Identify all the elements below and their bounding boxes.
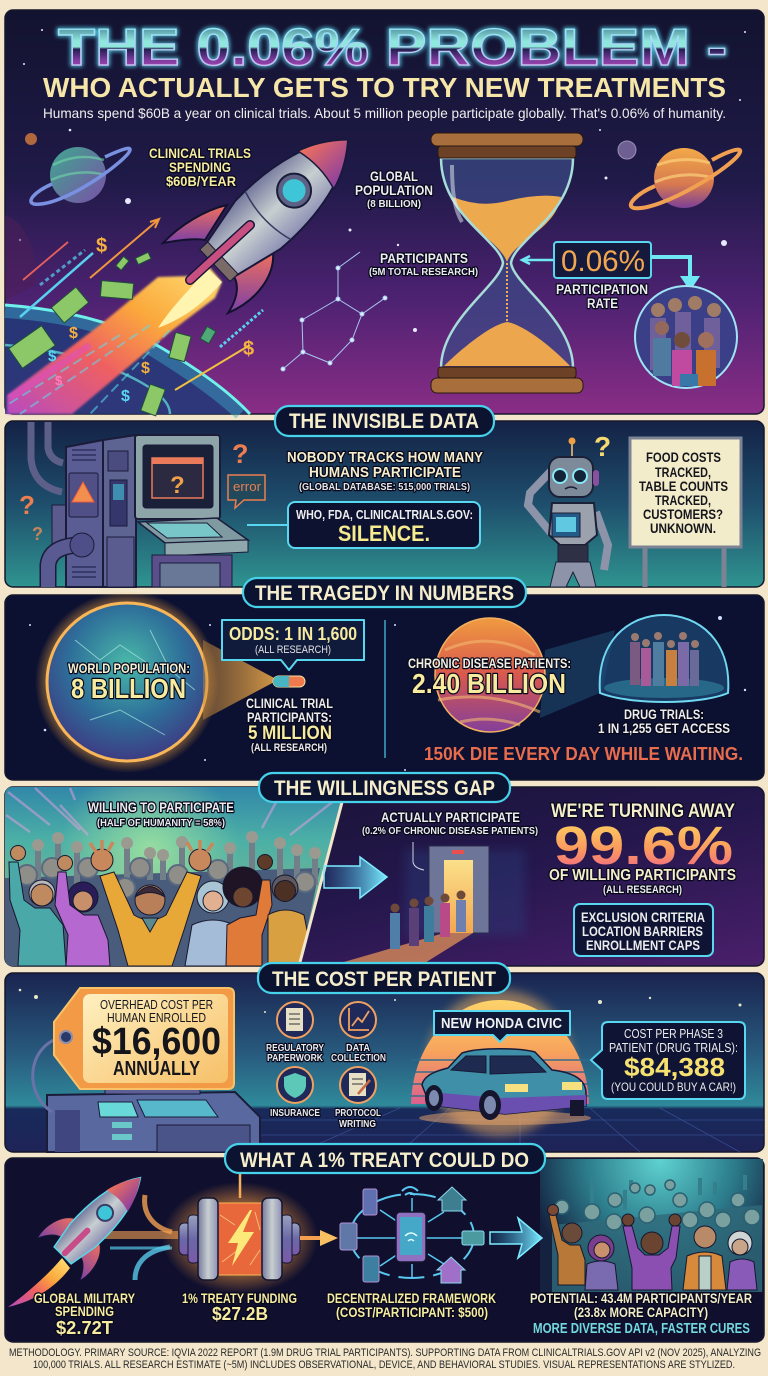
icon: question marks: ?	[19, 490, 35, 520]
sign: food costs: TABLE COUNTS	[639, 478, 728, 494]
methodology footer	[9, 1347, 761, 1371]
icon: price tag	[33, 988, 234, 1112]
label: actually participate	[362, 810, 538, 837]
callout: 0.06 percent: 0.06%	[561, 245, 645, 278]
heading: the willingness gap: THE WILLINGNESS GAP	[274, 777, 495, 800]
background stars	[19, 29, 746, 332]
arrow: willing to actual	[324, 857, 387, 898]
stat: turning away: 99.6%	[554, 816, 733, 876]
figure: orange woman	[223, 854, 272, 966]
label: clinical trials spending	[149, 145, 251, 189]
sign: food costs: CUSTOMERS?	[643, 506, 723, 522]
money and trails: $	[69, 325, 78, 342]
label: clinical trial participants: CLINICAL TRIAL	[246, 696, 333, 711]
figure: raised-arms man	[622, 1214, 681, 1290]
text: nobody tracks: NOBODY TRACKS HOW MANY	[287, 450, 483, 466]
panel: the cost per patient	[5, 973, 764, 1152]
icon: error bubble: error	[233, 479, 262, 494]
figure: mustard man	[268, 875, 308, 966]
icon: orange ringed planet	[618, 141, 740, 208]
callout: cost per phase 3: PATIENT (DRUG TRIALS):	[609, 1041, 738, 1055]
callout: odds: ODDS: 1 IN 1,600	[229, 624, 357, 644]
label: clinical trials spending: CLINICAL TRIALS	[149, 145, 251, 161]
label: global population: GLOBAL	[370, 169, 418, 184]
callout: barriers	[574, 904, 713, 956]
right fin	[228, 252, 273, 313]
figure: purple-haired woman	[585, 1235, 618, 1290]
stat: turning away	[549, 800, 736, 896]
background stars	[29, 616, 746, 771]
label: world population: WORLD POPULATION:	[68, 660, 190, 676]
icon: regulatory paperwork	[266, 1002, 324, 1064]
heading: the invisible data: THE INVISIBLE DATA	[289, 410, 479, 433]
callout: odds	[222, 620, 364, 670]
label: drug trials: 1 IN 1,255 GET ACCESS	[598, 721, 730, 736]
label: willing to participate: WILLING TO PARTICIPATE	[88, 799, 234, 815]
earth arcs	[5, 305, 250, 414]
figure: silver woman	[184, 880, 230, 966]
icon: lit doorway with queue	[330, 842, 525, 966]
label: willing to participate	[88, 799, 234, 829]
icon: data collection: DATA	[346, 1042, 370, 1054]
label: treaty funding: 1% TREATY FUNDING	[182, 1291, 297, 1306]
arrow: network to crowd	[490, 1218, 542, 1258]
icon: world globe	[35, 591, 219, 773]
label: global military spending: SPENDING	[55, 1304, 114, 1319]
label: decentralized framework: (COST/PARTICIPANT: $500)	[336, 1305, 488, 1320]
icon: protocol writing: WRITING	[339, 1118, 376, 1130]
icon: confused robot	[528, 431, 611, 587]
label: actually participate: (0.2% OF CHRONIC DISEASE PATIENTS)	[362, 825, 538, 837]
icon: rocket	[163, 115, 371, 313]
callout: barriers: EXCLUSION CRITERIA	[581, 910, 705, 925]
label: global military spending: GLOBAL MILITARY	[34, 1291, 135, 1306]
callout: new honda civic: NEW HONDA CIVIC	[441, 1015, 562, 1032]
label: potential participants	[530, 1291, 752, 1337]
callout: 0.06 percent	[522, 242, 700, 291]
arrows into reactor	[105, 1173, 240, 1280]
label: clinical trials spending: SPENDING	[169, 159, 231, 175]
money and trails: $	[121, 388, 130, 405]
back row	[592, 1175, 745, 1210]
icon: capsule	[273, 676, 305, 687]
label: participants: PARTICIPANTS	[380, 251, 468, 266]
crowd scene	[540, 1159, 763, 1292]
label: clinical trial participants: PARTICIPANTS:	[247, 710, 332, 725]
icon: question marks: ?	[32, 524, 43, 544]
diagonal divider	[299, 787, 346, 966]
label: participation rate: PARTICIPATION	[556, 282, 648, 297]
floor grid	[260, 1108, 764, 1152]
intro sentence: Humans spend $60B a year on clinical trials. About 5 million people participate globally. That's 0.06% of humanity.	[43, 105, 726, 121]
label: treaty funding: $27.2B	[212, 1304, 268, 1324]
figure: yellow man	[90, 840, 213, 966]
icon: data collection: COLLECTION	[331, 1052, 386, 1064]
label: chronic disease patients: 2.40 BILLION	[412, 668, 566, 699]
stat: turning away: OF WILLING PARTICIPANTS	[549, 867, 736, 884]
icon: protocol writing: PROTOCOL	[335, 1107, 381, 1119]
icon: regulatory paperwork: REGULATORY	[266, 1042, 324, 1054]
text: nobody tracks	[287, 450, 483, 493]
icon: broken computer: ?	[170, 472, 185, 499]
hill shape	[5, 215, 36, 300]
icon: protocol writing	[335, 1067, 381, 1130]
callout: cost per phase 3: $84,388	[624, 1052, 725, 1082]
icon: question marks	[19, 439, 248, 544]
label: global military spending: $2.72T	[56, 1318, 113, 1338]
figure: teal man	[9, 846, 66, 966]
callout: new honda civic	[434, 1011, 570, 1042]
rocket flame	[7, 262, 222, 414]
background stars	[19, 989, 741, 1013]
figure: purple woman	[55, 856, 110, 966]
icon: broken computer	[48, 435, 248, 587]
label: willing to participate: (HALF OF HUMANITY = 58%)	[97, 817, 225, 829]
icon: question marks: ?	[232, 439, 248, 469]
label: participants	[369, 251, 478, 278]
icon: glass dome with people	[600, 615, 728, 702]
label: clinical trial participants	[246, 696, 333, 754]
callout: cost per phase 3: (YOU COULD BUY A CAR!)	[611, 1080, 736, 1094]
money and trails: $	[96, 235, 107, 257]
icon: price tag: $16,600	[92, 1021, 221, 1063]
sign: food costs: TRACKED,	[655, 464, 711, 480]
icon: price tag: ANNUALLY	[113, 1058, 201, 1080]
stat: turning away: (ALL RESEARCH)	[603, 884, 682, 896]
beam to pill	[203, 640, 278, 720]
panel: the invisible data	[5, 421, 764, 587]
icon: decentralized network	[340, 1187, 484, 1283]
icon: price tag: OVERHEAD COST PER	[100, 997, 213, 1012]
label: clinical trial participants: (ALL RESEARCH)	[251, 742, 327, 754]
icon: people in bubble	[635, 286, 737, 388]
icon: chronic planet	[435, 618, 545, 732]
text: nobody tracks: (GLOBAL DATABASE: 515,000 TRIALS)	[299, 481, 470, 493]
label: clinical trial participants: 5 MILLION	[248, 723, 332, 744]
background crowd	[5, 868, 320, 966]
sign: food costs	[630, 438, 741, 587]
callout: cost per phase 3: COST PER PHASE 3	[624, 1027, 723, 1041]
money and trails	[9, 219, 263, 416]
panel: what a 1% treaty could do	[5, 1155, 764, 1342]
icon: retro sun	[411, 990, 589, 1136]
label: global population: (8 BILLION)	[367, 199, 421, 210]
panel: the tragedy in numbers	[5, 591, 764, 780]
money and trails: $	[141, 360, 150, 377]
left crowd scene	[5, 787, 350, 966]
label: decentralized framework	[327, 1291, 496, 1320]
callout: odds: (ALL RESEARCH)	[255, 644, 331, 656]
label: potential participants: (23.8x MORE CAPACITY)	[574, 1305, 708, 1320]
left fin	[163, 205, 227, 243]
heading: the tragedy in numbers: THE TRAGEDY IN NUMBERS	[255, 582, 514, 605]
icon: error bubble	[228, 475, 265, 508]
callout: barriers: ENROLLMENT CAPS	[586, 938, 700, 953]
icon: hourglass	[431, 133, 583, 393]
icon: insurance: INSURANCE	[270, 1107, 320, 1119]
sign: food costs: TRACKED,	[655, 492, 711, 508]
figure: front left man	[548, 1204, 585, 1285]
icon: computer base	[47, 1086, 260, 1152]
panel: hero	[5, 10, 764, 416]
lower pipe	[48, 545, 80, 587]
callout: barriers: LOCATION BARRIERS	[582, 924, 703, 939]
beam to dome	[540, 630, 615, 718]
money and trails: $	[55, 373, 63, 388]
title: THE 0.06% PROBLEM -	[58, 19, 727, 77]
figure: orange jacket man	[683, 1226, 726, 1290]
label: treaty funding	[182, 1291, 297, 1324]
money and trails: $	[48, 348, 57, 365]
figure: silver-haired woman	[727, 1231, 757, 1290]
icon: confused robot: ?	[594, 431, 611, 462]
label: actually participate: ACTUALLY PARTICIPATE	[381, 810, 520, 825]
label: clinical trials spending: $60B/YEAR	[166, 173, 236, 189]
icon: car	[419, 1049, 591, 1125]
callout: cost per phase 3	[591, 1022, 745, 1099]
label: global population	[355, 169, 433, 210]
label: decentralized framework: DECENTRALIZED FRAMEWORK	[327, 1291, 496, 1306]
callout: silence: WHO, FDA, CLINICALTRIALS.GOV:	[296, 507, 473, 522]
icon: insurance	[270, 1067, 320, 1119]
label: participants: (5M TOTAL RESEARCH)	[369, 267, 478, 278]
heading: what a 1% treaty could do: WHAT A 1% TREATY COULD DO	[240, 1149, 529, 1172]
label: chronic disease patients: CHRONIC DISEASE PATIENTS:	[408, 656, 571, 671]
icon: pipes	[31, 422, 63, 492]
sign: food costs: FOOD COSTS	[646, 449, 721, 465]
label: participation rate	[556, 282, 648, 311]
title: THE 0.06% PROBLEM -	[58, 19, 727, 77]
stat: turning away: WE'RE TURNING AWAY	[551, 800, 735, 822]
callout: silence	[247, 502, 480, 548]
icon: constellation	[281, 252, 387, 371]
sign: food costs: UNKNOWN.	[650, 520, 716, 536]
icon: reactor	[162, 1182, 318, 1294]
icon: price tag: HUMAN ENROLLED	[107, 1010, 206, 1025]
panel: the willingness gap	[5, 787, 764, 966]
label: chronic disease patients	[408, 656, 571, 699]
icon: small rocket	[8, 1155, 163, 1307]
label: drug trials	[598, 707, 730, 736]
label: global military spending	[34, 1291, 135, 1338]
icon: green ringed planet	[25, 133, 130, 204]
heading: the cost per patient: THE COST PER PATIENT	[272, 968, 496, 991]
icon: data collection	[331, 1002, 386, 1064]
label: world population: 8 BILLION	[71, 673, 186, 704]
label: participation rate: RATE	[587, 296, 618, 311]
callout: silence: SILENCE.	[338, 521, 430, 546]
money and trails: $	[243, 338, 254, 360]
text: nobody tracks: HUMANS PARTICIPATE	[309, 465, 461, 481]
callout: deaths per day: 150K DIE EVERY DAY WHILE WAITING.	[424, 744, 743, 764]
label: drug trials: DRUG TRIALS:	[624, 707, 704, 722]
icon: regulatory paperwork: PAPERWORK	[267, 1052, 323, 1064]
arrow: reactor to network	[300, 1230, 338, 1246]
label: world population	[68, 660, 190, 704]
label: global population: POPULATION	[355, 183, 433, 198]
subtitle: WHO ACTUALLY GETS TO TRY NEW TREATMENTS	[43, 72, 726, 103]
